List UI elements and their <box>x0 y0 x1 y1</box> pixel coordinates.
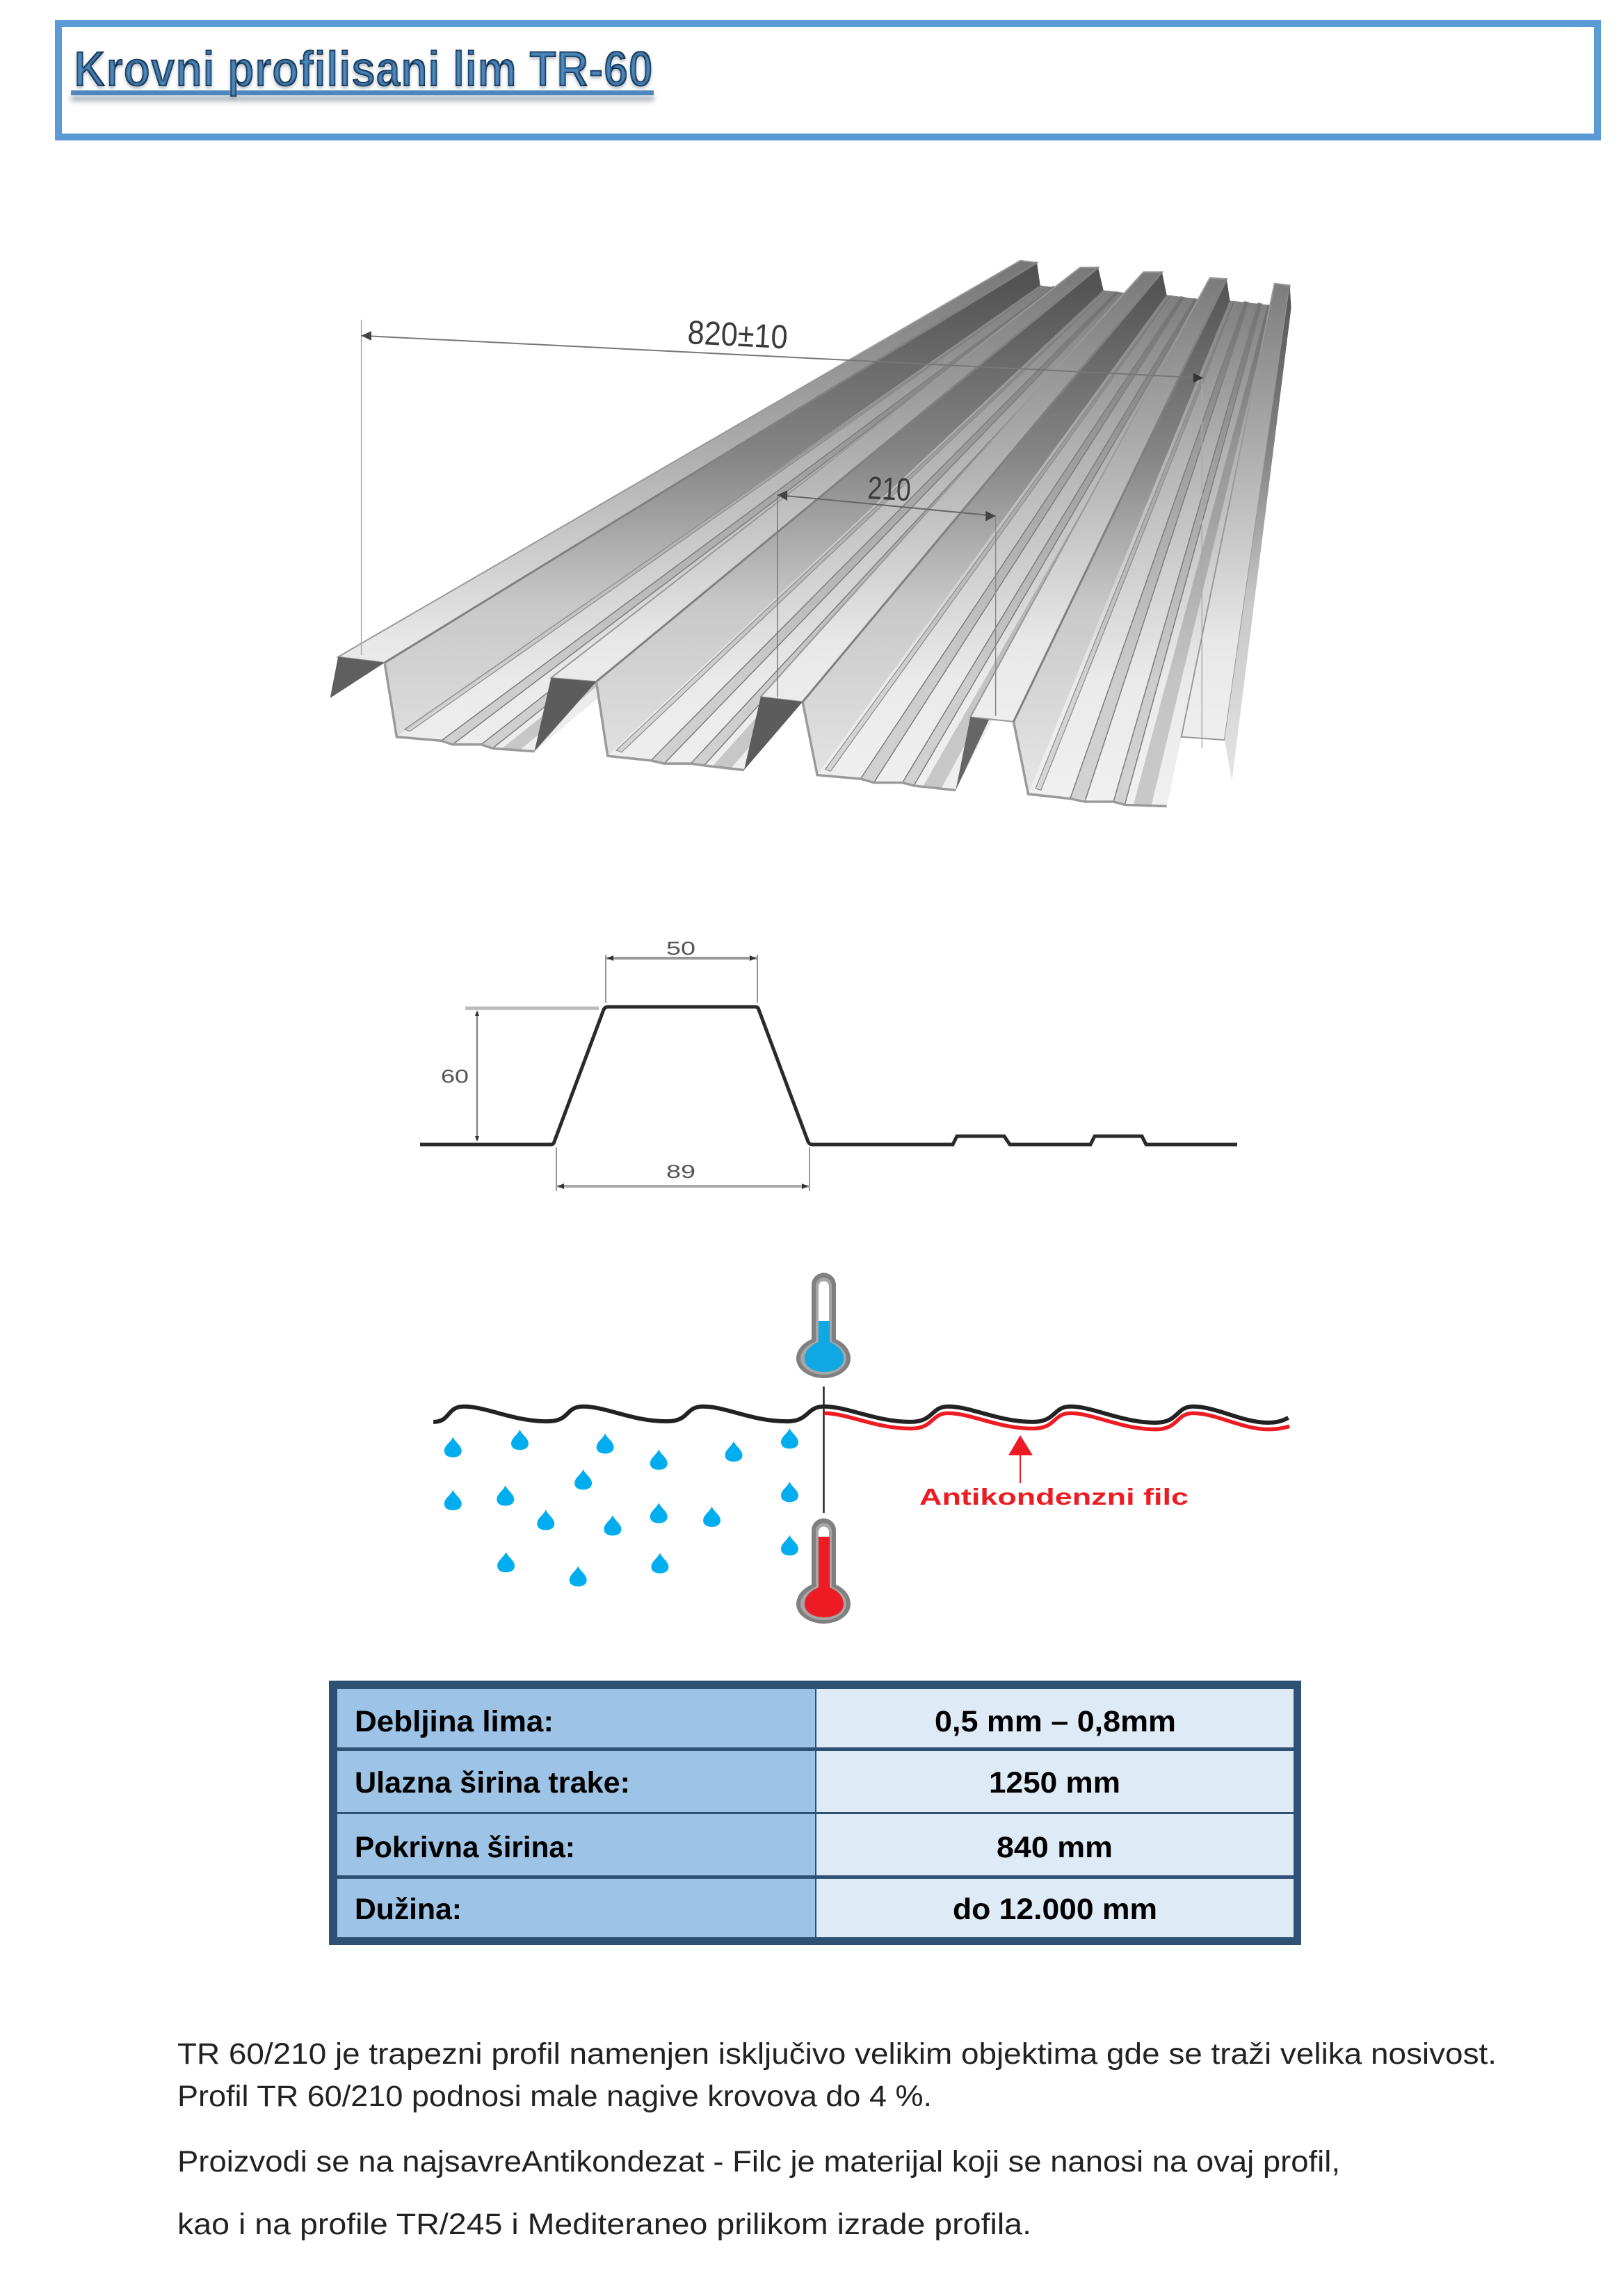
arrow to felt <box>1008 1435 1033 1483</box>
roof sheet wave <box>433 1407 1289 1423</box>
description text: TR 60/210 je trapezni profil namenjen isključivo velikim objektima gde se traži velika nosivost. <box>177 2037 1497 2071</box>
row: thickness: 0,5 mm – 0,8mm <box>935 1705 1176 1738</box>
row: length: do 12.000 mm <box>953 1893 1157 1926</box>
rib 3 <box>744 272 1210 791</box>
row: cover width: Pokrivna širina: <box>355 1831 575 1864</box>
dimension 50 <box>606 938 757 1003</box>
row: length <box>337 1879 1294 1937</box>
dimension 60 <box>441 1008 599 1142</box>
row: cover width: 840 mm <box>997 1831 1113 1864</box>
felt layer <box>824 1413 1289 1430</box>
dimension 89 <box>556 1147 810 1191</box>
3D illustration: trapezoidal roof sheet <box>330 261 1291 807</box>
row: strip width: 1250 mm <box>989 1766 1120 1800</box>
felt label: Antikondenzni filc <box>919 1484 1189 1510</box>
row: cover width <box>337 1814 1294 1875</box>
row: thickness <box>337 1689 1294 1747</box>
cross-section drawing with dimensions <box>420 938 1237 1191</box>
water drops <box>444 1428 798 1587</box>
rib 5 <box>1182 284 1291 781</box>
dimension 89: 89 <box>666 1161 695 1182</box>
title panel <box>58 24 1597 137</box>
description text: kao i na profile TR/245 i Mediteraneo prilikom izrade profila. <box>177 2208 1031 2241</box>
title underline <box>71 90 654 101</box>
title: Krovni profilisani lim TR-60 <box>74 42 653 97</box>
row: length: Dužina: <box>355 1893 462 1926</box>
dimension 60: 60 <box>441 1066 469 1087</box>
dimension lines 820 and 210 <box>362 320 1203 748</box>
description text: Proizvodi se na najsavreAntikondezat - Filc je materijal koji se nanosi na ovaj profil, <box>177 2145 1340 2178</box>
icon: cold thermometer <box>796 1272 851 1378</box>
divider line <box>823 1387 825 1513</box>
rib 2 <box>534 268 1143 770</box>
condensation diagram <box>433 1272 1289 1624</box>
row: strip width <box>337 1751 1294 1812</box>
rib 4 <box>956 277 1275 807</box>
dimension 50: 50 <box>666 938 695 959</box>
dimension label 210: 210 <box>867 469 912 508</box>
icon: warm thermometer <box>796 1519 851 1624</box>
description text <box>177 2037 1497 2241</box>
specification table <box>329 1681 1301 1945</box>
rib 1 <box>330 261 1080 752</box>
dimension label 820: 820±10 <box>686 314 789 356</box>
profile outline <box>420 1007 1237 1145</box>
row: strip width: Ulazna širina trake: <box>355 1766 630 1800</box>
sheet surfaces <box>330 261 1291 807</box>
description text: Profil TR 60/210 podnosi male nagive krovova do 4 %. <box>177 2080 932 2113</box>
row: thickness: Debljina lima: <box>355 1705 554 1738</box>
